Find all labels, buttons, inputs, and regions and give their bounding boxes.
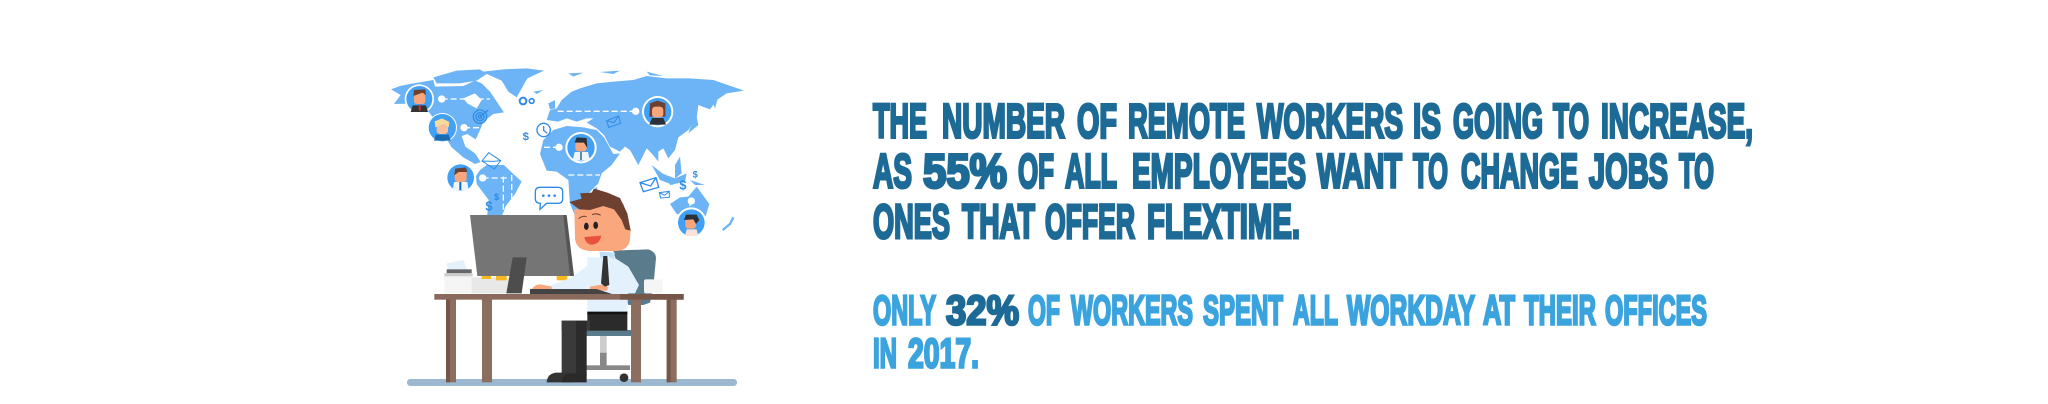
heading: remote workers statement: IS xyxy=(1413,96,1441,148)
avatar: man with blue tie xyxy=(447,164,474,191)
heading: remote workers statement: AS xyxy=(873,146,912,198)
text block: office workers statistic: ALL xyxy=(1293,287,1338,334)
floor shadow xyxy=(407,379,737,386)
text block: office workers statistic: ONLY xyxy=(873,287,936,334)
heading: remote workers statement: EMPLOYEES xyxy=(1132,146,1306,198)
avatar: man in Africa xyxy=(565,132,597,163)
office chair xyxy=(572,249,656,382)
heading: remote workers statement: FLEXTIME. xyxy=(1147,196,1300,249)
heading: remote workers statement: WANT xyxy=(1317,146,1402,198)
icon: envelopes xyxy=(482,116,669,198)
heading: remote workers statement: OF xyxy=(1018,146,1054,198)
text block: office workers statistic: OFFICES xyxy=(1605,287,1707,334)
icon: gears xyxy=(520,98,534,104)
New Zealand xyxy=(723,217,733,230)
printer and papers xyxy=(444,260,508,293)
person at desk illustration xyxy=(407,187,737,386)
heading: remote workers statement: NUMBER xyxy=(942,96,1065,148)
heading: remote workers statement xyxy=(873,96,1753,249)
heading: remote workers statement: INCREASE, xyxy=(1601,96,1753,148)
heading: remote workers statement: ONES xyxy=(873,196,950,249)
heading: remote workers statement: JOBS xyxy=(1589,146,1668,198)
avatar: woman with brown hair xyxy=(642,96,673,127)
heading: remote workers statement: WORKERS xyxy=(1257,96,1403,148)
icon: dollar signs: $ xyxy=(693,169,699,179)
man torso and arms xyxy=(531,252,639,312)
heading: remote workers statement: 55% xyxy=(923,146,1007,198)
heading: remote workers statement: TO xyxy=(1679,146,1714,198)
speech bubble xyxy=(535,187,563,209)
coffee cup xyxy=(644,279,663,293)
heading: remote workers statement: THE xyxy=(873,96,927,148)
heading: remote workers statement: OF xyxy=(1077,96,1117,148)
heading: remote workers statement: TO xyxy=(1413,146,1448,198)
icon: dollar signs: $ xyxy=(485,200,492,214)
map continents xyxy=(391,68,744,221)
icon: clock xyxy=(537,123,550,137)
text block: office workers statistic: WORKERS xyxy=(1071,287,1193,334)
heading: remote workers statement: TO xyxy=(1553,96,1589,148)
text block: office workers statistic: WORKDAY xyxy=(1347,287,1475,334)
heading: remote workers statement: REMOTE xyxy=(1128,96,1245,148)
avatar: man in suit xyxy=(405,84,434,114)
text block: office workers statistic: OF xyxy=(1028,287,1060,334)
icon: dollar signs xyxy=(485,131,699,214)
heading: remote workers statement: CHANGE xyxy=(1461,146,1578,198)
heading: remote workers statement: GOING xyxy=(1453,96,1543,148)
heading: remote workers statement: ALL xyxy=(1065,146,1117,198)
computer monitor xyxy=(470,215,574,293)
text block: office workers statistic: AT xyxy=(1483,287,1515,334)
sticky notes xyxy=(482,276,567,280)
icon: dollar signs: $ xyxy=(679,178,686,192)
world map illustration xyxy=(391,68,744,221)
text block: office workers statistic xyxy=(873,287,1707,377)
avatar: blonde woman xyxy=(428,113,457,142)
man head xyxy=(569,189,631,251)
heading: remote workers statement: OFFER xyxy=(1045,196,1135,249)
text block: office workers statistic: THEIR xyxy=(1524,287,1596,334)
keyboard xyxy=(530,289,612,294)
man legs xyxy=(547,311,627,382)
text block: office workers statistic: IN xyxy=(873,330,897,377)
heading: remote workers statement: THAT xyxy=(962,196,1035,249)
text block: office workers statistic: 2017. xyxy=(908,330,979,377)
desk xyxy=(434,294,684,382)
text block: office workers statistic: SPENT xyxy=(1203,287,1283,334)
avatar: man in Australia xyxy=(676,207,707,238)
icon: dollar signs: $ xyxy=(523,131,530,143)
icon: dollar signs: $ xyxy=(494,192,500,202)
text block: office workers statistic: 32% xyxy=(946,287,1019,334)
icon: target xyxy=(473,110,488,123)
white water cutouts xyxy=(463,93,482,108)
connection lines xyxy=(438,95,695,220)
